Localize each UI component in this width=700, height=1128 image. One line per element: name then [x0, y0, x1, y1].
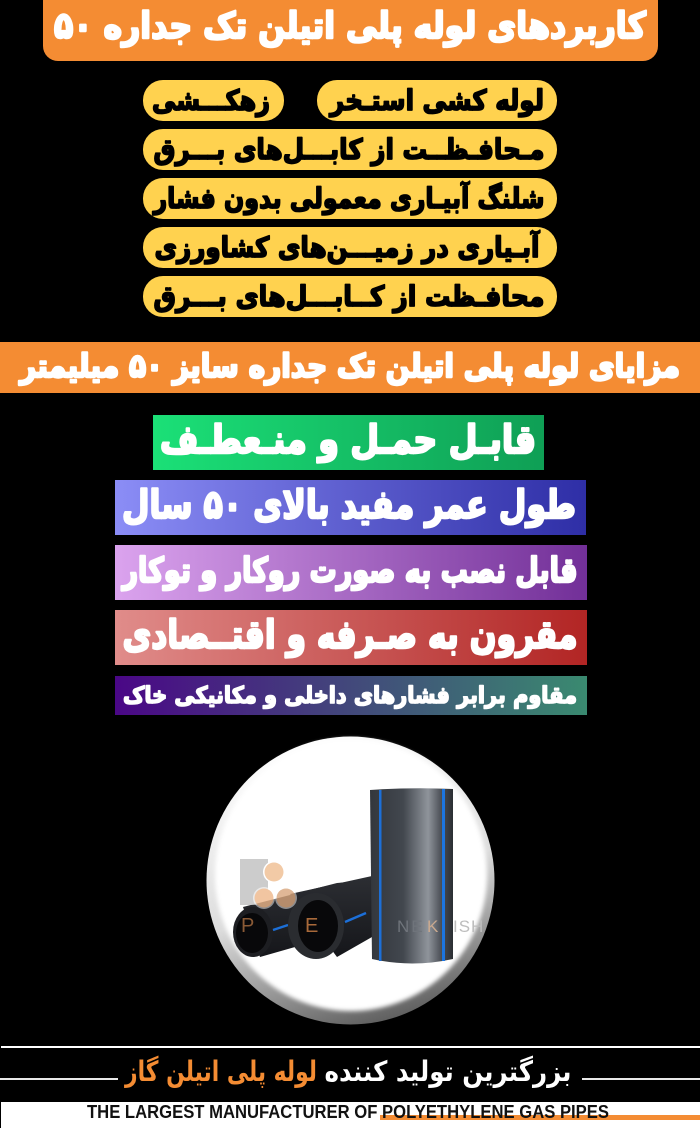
watermark logo — [240, 859, 297, 909]
pill: cable protection 2: محافـظت از کــابـــل‌های بـــرق — [154, 280, 544, 313]
watermark text: E — [305, 915, 318, 937]
pill: pool piping: لوله کشی استـخر — [328, 84, 544, 117]
large horizontal pipe — [288, 876, 372, 959]
english tagline: THE LARGEST MANUFACTURER OF POLYETHYLENE GAS PIPES — [87, 1102, 609, 1122]
benefit: pressure resistant — [115, 676, 587, 715]
benefit: portable and flexible: قابـل حمـل و منـعطـف — [160, 418, 536, 463]
pill: farmland irrigation: آبـیاری در زمیـــن‌های کشاورزی — [154, 230, 541, 264]
footer slogan white: بزرگترین تولید کننده — [324, 1055, 572, 1088]
footer — [0, 1046, 700, 1128]
watermark text: NE — [397, 917, 425, 936]
footer slogan orange: لوله پلی اتیلن گاز — [123, 1055, 317, 1088]
benefit: surface or concealed installation: قابل نصب به صورت روکار و توکار — [121, 551, 577, 591]
benefit: economical: مقرون به صـرفه و اقتــصادی — [122, 613, 578, 658]
watermark text — [241, 915, 484, 937]
pill: cable protection: مـحافـظــت از کابـــل‌های بـــرق — [154, 133, 544, 166]
pill: drainage: زهکـــشی — [152, 84, 270, 117]
footer orange accent — [380, 1115, 700, 1120]
watermark text: ISH — [453, 917, 484, 936]
product photo circle — [206, 736, 494, 1024]
pill: irrigation hose: شلنگ آبیـاری معمولی بدون فشار — [152, 181, 544, 215]
benefit: economical — [115, 610, 587, 665]
watermark text: P — [241, 915, 254, 937]
footer white strip — [1, 1102, 700, 1128]
small horizontal pipe — [233, 880, 372, 957]
benefit: service life: طول عمر مفید بالای ۵۰ سال — [122, 483, 576, 528]
benefit: pressure resistant: مقاوم برابر فشارهای داخلی و مکانیکی خاک — [123, 683, 577, 709]
title banner — [43, 0, 658, 61]
vertical pipe — [370, 788, 453, 964]
benefit: surface or concealed installation — [115, 545, 587, 600]
watermark text: K — [427, 917, 439, 936]
